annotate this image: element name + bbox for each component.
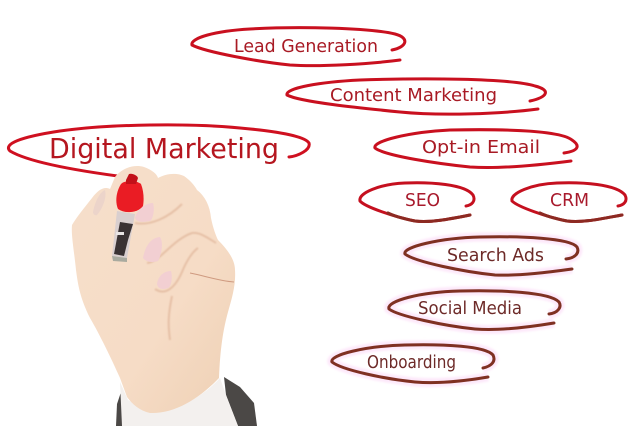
marker [112,174,144,262]
fingernail 2 [143,237,162,262]
bubble: Digital Marketing [8,125,309,178]
hand holding marker [72,166,257,426]
fingernail 1 [135,203,154,222]
bubble: Onboarding [332,345,494,383]
palm crease [190,273,234,282]
bubble: Social Media: Social Media [418,298,522,319]
bubble: Opt-in Email [375,130,577,168]
bubble: Content Marketing: Content Marketing [330,85,497,106]
thumb nail [93,190,106,215]
bubble: CRM: CRM [550,190,589,211]
bubble: Lead Generation: Lead Generation [234,36,378,57]
bubble: SEO: SEO [405,190,440,211]
bubble: Digital Marketing: Digital Marketing [49,132,279,165]
bubble: Content Marketing [287,79,545,114]
bubble: Onboarding: Onboarding [367,352,456,373]
bubble: Search Ads [405,237,578,275]
bubble: Opt-in Email: Opt-in Email [422,137,540,158]
bubble: SEO [360,183,474,222]
bubble: Lead Generation [192,28,405,66]
bubble: Social Media [389,291,560,330]
hand shape [72,166,235,413]
sleeve [116,377,257,426]
fingernail 3 [157,271,172,289]
finger shadows [135,204,216,340]
bubble: CRM [512,183,626,222]
bubble: Search Ads: Search Ads [447,245,544,266]
